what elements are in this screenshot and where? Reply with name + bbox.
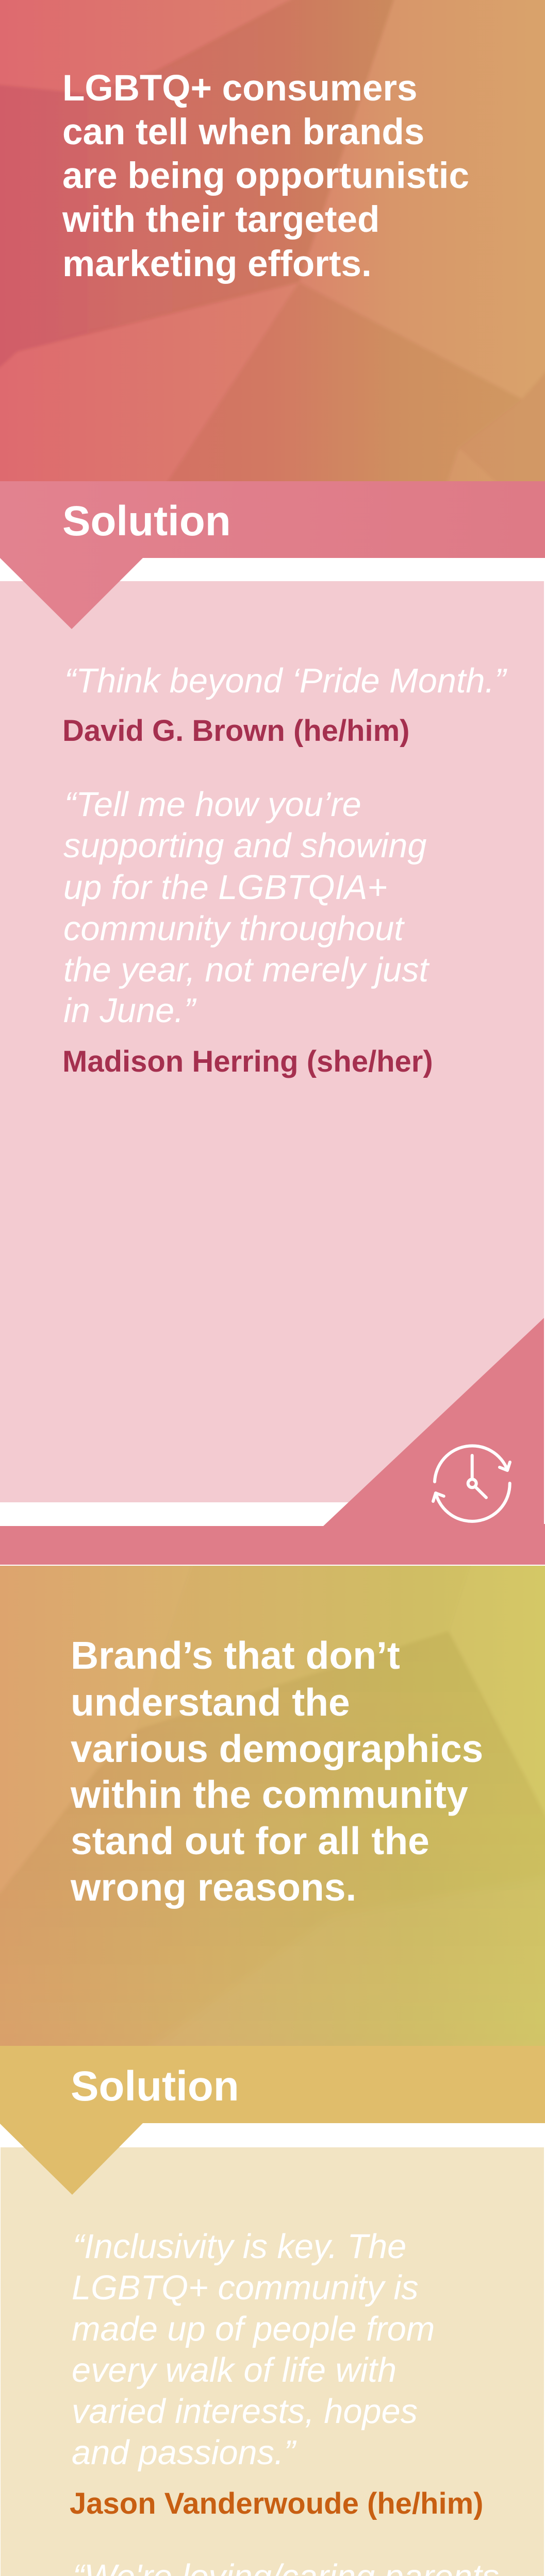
heading: first problem statement: are being opportunistic bbox=[62, 156, 469, 196]
text block: Jason Vanderwoude quote: and passions.” bbox=[72, 2434, 297, 2472]
heading: Solution: Solution bbox=[62, 498, 231, 545]
heading: first problem statement: LGBTQ+ consumers bbox=[62, 68, 417, 109]
icon: clock with circular arrows bbox=[433, 1446, 510, 1521]
text block: Madison Herring quote: the year, not merely just bbox=[63, 951, 430, 989]
panel: second solution quotes background bbox=[1, 2147, 544, 2576]
heading: second problem statement: within the community bbox=[70, 1773, 468, 1816]
text block: Jason Vanderwoude quote: varied interests, hopes bbox=[72, 2393, 418, 2431]
panel: first solution bottom band and corner bbox=[0, 1318, 545, 1565]
panel: second problem header bbox=[0, 1556, 545, 2056]
text block: Jason Vanderwoude quote: LGBTQ+ community is bbox=[72, 2269, 419, 2307]
text block: David G. Brown quote bbox=[62, 662, 507, 748]
text block: Jason Vanderwoude quote: made up of people from bbox=[72, 2310, 435, 2348]
text block: Madison Herring quote: community throughout bbox=[63, 910, 405, 948]
heading: first problem statement bbox=[62, 68, 469, 284]
attribution: David G. Brown: David G. Brown (he/him) bbox=[62, 714, 409, 748]
heading: second problem statement bbox=[70, 1634, 483, 1909]
heading: second problem statement: wrong reasons. bbox=[70, 1866, 356, 1909]
heading: second problem statement: stand out for all the bbox=[71, 1819, 430, 1862]
banner: second solution heading bbox=[0, 2046, 545, 2195]
banner: first solution heading bbox=[0, 481, 545, 629]
heading: second problem statement: Brand’s that don’t bbox=[71, 1634, 400, 1677]
text block: Madison Herring quote: up for the LGBTQIA+ bbox=[63, 869, 387, 907]
text block: Madison Herring quote bbox=[62, 786, 433, 1078]
text block: Jason Vanderwoude quote bbox=[70, 2228, 483, 2520]
heading: first problem statement: can tell when brands bbox=[62, 112, 424, 152]
attribution: Jason Vanderwoude: Jason Vanderwoude (he/him) bbox=[70, 2487, 483, 2520]
text block: Madison Herring quote: in June.” bbox=[63, 992, 197, 1030]
panel: first solution quotes background bbox=[0, 581, 544, 1502]
text block: Jason Vanderwoude quote: “Inclusivity is key. The bbox=[73, 2228, 406, 2266]
panel: first problem header bbox=[0, 0, 545, 489]
heading: first problem statement: with their targeted bbox=[62, 199, 379, 240]
heading: Solution: Solution bbox=[71, 2063, 239, 2110]
heading: second problem statement: understand the bbox=[71, 1681, 350, 1724]
text block: Jason Vanderwoude quote: every walk of life with bbox=[72, 2351, 397, 2389]
text block: David G. Brown quote: “Think beyond ‘Pride Month.” bbox=[64, 662, 507, 700]
heading: first problem statement: marketing efforts. bbox=[62, 244, 372, 284]
heading: second problem statement: various demographics bbox=[71, 1727, 483, 1770]
attribution: Madison Herring: Madison Herring (she/her) bbox=[62, 1045, 433, 1078]
text block: Madison Herring quote: “Tell me how you’re bbox=[64, 786, 361, 824]
text block: Madison Herring quote: supporting and showing bbox=[63, 827, 426, 865]
